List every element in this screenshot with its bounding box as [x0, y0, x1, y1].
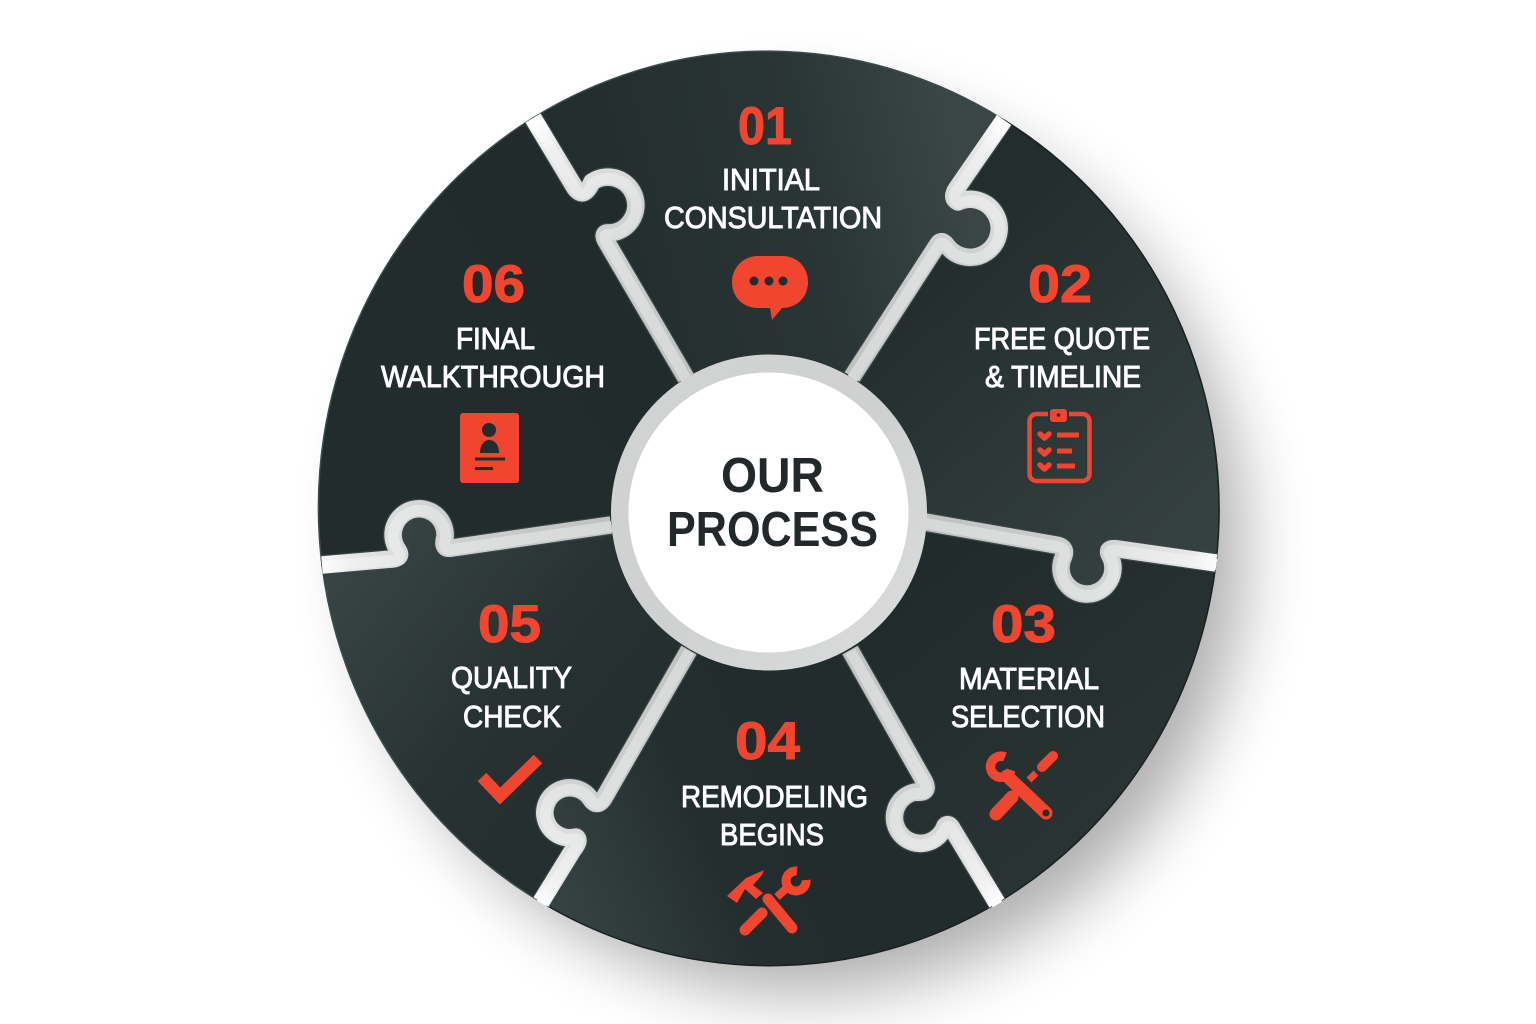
label: initial consultation: INITIAL: [722, 162, 820, 197]
number 01: 01: [738, 97, 792, 156]
number 02: 02: [1028, 255, 1092, 314]
icon: clipboard checklist: [1030, 408, 1090, 481]
label: material selection: SELECTION: [951, 699, 1105, 734]
label: initial consultation: [664, 162, 882, 235]
hub title: [667, 449, 878, 557]
label: quality check: [451, 660, 572, 734]
puzzle segment 05: [322, 509, 769, 902]
label: free quote and timeline: FREE QUOTE: [974, 321, 1150, 356]
icon: speech bubble: [732, 256, 808, 320]
label: remodeling begins: [681, 779, 868, 852]
number 06: 06: [462, 255, 525, 314]
icon: wrench and screwdriver: [991, 756, 1053, 816]
label: final walkthrough: FINAL: [456, 321, 535, 356]
hub white disc: [628, 372, 908, 652]
number 05: 05: [478, 595, 541, 654]
label: final walkthrough: [381, 321, 605, 394]
puzzle segment 04: [541, 512, 997, 966]
puzzle segment 06: [318, 118, 769, 565]
puzzle segment 02: [769, 120, 1219, 594]
label: free quote and timeline: & TIMELINE: [985, 359, 1141, 394]
label: final walkthrough: WALKTHROUGH: [381, 359, 605, 394]
puzzle segment 03: [769, 512, 1216, 903]
center hub: our process: [611, 354, 927, 670]
number 03: 03: [991, 595, 1056, 654]
panel: step 06 final walkthrough: [318, 118, 769, 565]
disc drop shadow: [363, 103, 1243, 993]
label: initial consultation: CONSULTATION: [664, 200, 882, 235]
icon: profile card: [460, 413, 519, 483]
icon: hammer and wrench: [727, 870, 806, 930]
panel: step 03 material selection: [769, 512, 1216, 903]
panel: step 05 quality check: [322, 509, 769, 902]
panel: step 01 initial consultation: [533, 51, 1004, 512]
label: material selection: MATERIAL: [959, 661, 1099, 696]
hub outer ring: [611, 354, 927, 670]
number 04: 04: [735, 712, 801, 771]
puzzle segment 01: [533, 51, 1004, 512]
label: quality check: CHECK: [463, 699, 561, 734]
panel: step 02 free quote and timeline: [769, 120, 1219, 594]
icon: check mark: [482, 759, 538, 796]
panel: step 04 remodeling begins: [541, 512, 997, 966]
hub title: PROCESS: [667, 503, 878, 557]
puzzle seams between segments: [322, 118, 1216, 904]
label: material selection: [951, 661, 1105, 734]
label: quality check: QUALITY: [451, 660, 572, 695]
label: remodeling begins: REMODELING: [681, 779, 868, 814]
label: free quote and timeline: [974, 321, 1150, 394]
label: remodeling begins: BEGINS: [720, 817, 824, 852]
hub title: OUR: [721, 449, 824, 503]
